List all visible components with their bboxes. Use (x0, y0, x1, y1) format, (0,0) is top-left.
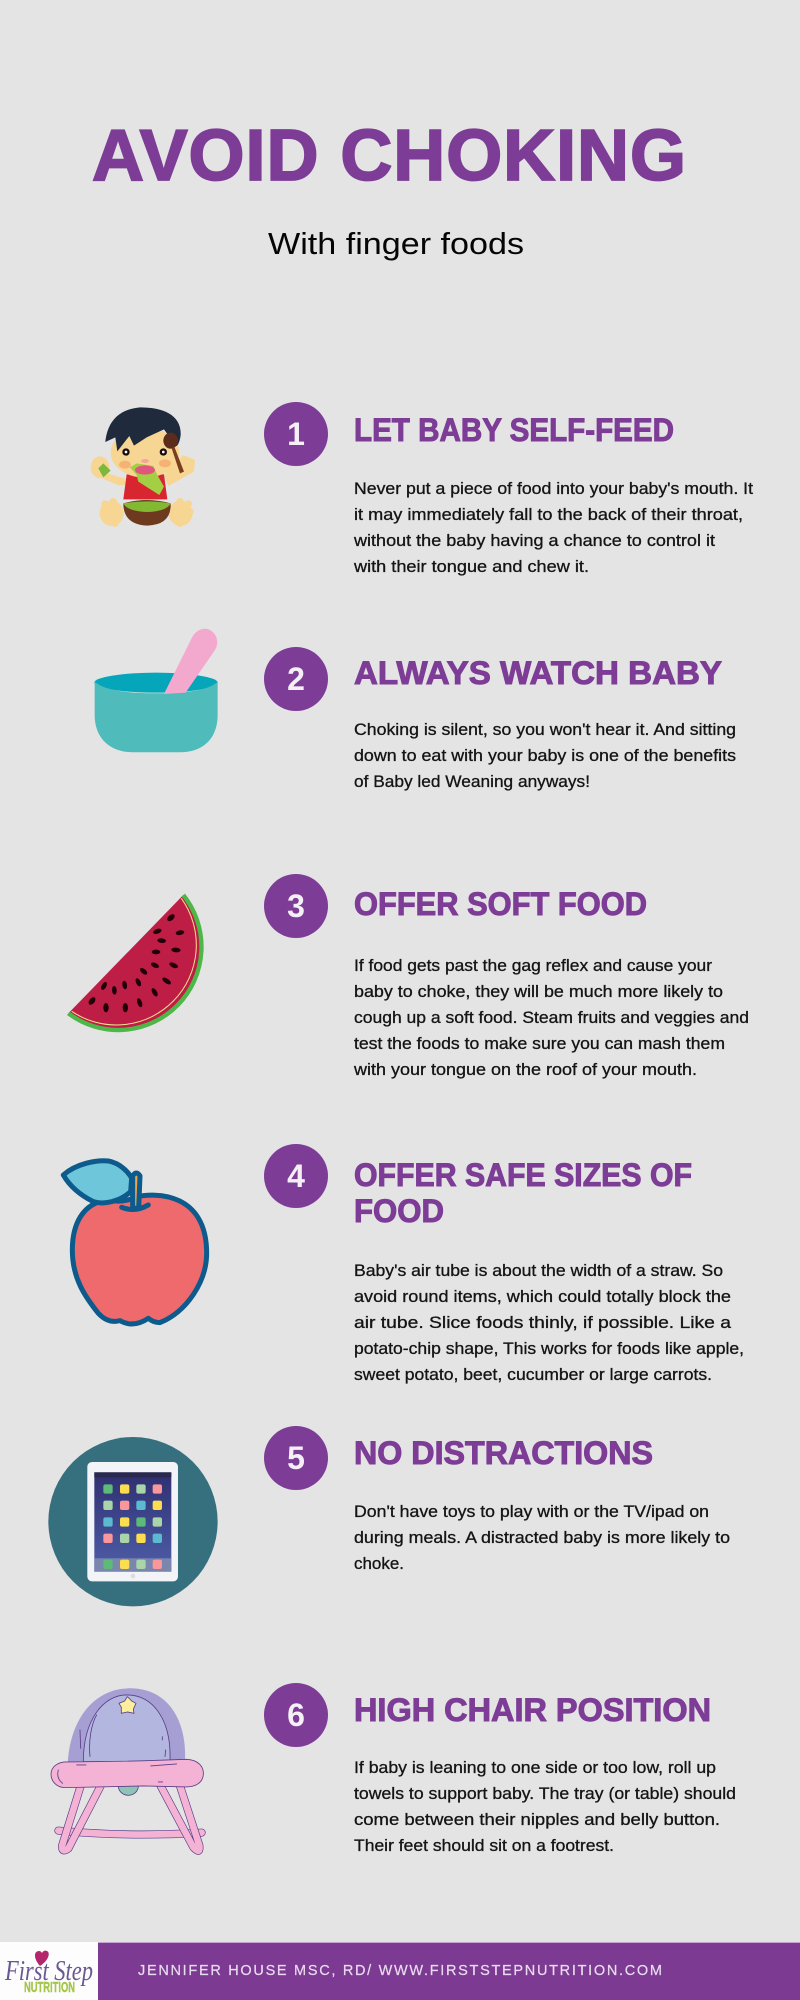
number badge 4 (264, 1144, 328, 1208)
body text: of Baby led Weaning anyways! (354, 773, 590, 791)
subtitle: With finger foods (268, 226, 524, 261)
body text: towels to support baby. The tray (or table) should (354, 1785, 736, 1803)
body text: Baby's air tube is about the width of a straw. So (354, 1262, 723, 1280)
number badge 5: 5 (287, 1440, 305, 1476)
icon: tablet in circle (48, 1437, 218, 1606)
panel: step 5 no distractions (48, 1426, 730, 1606)
logo: First Step Nutrition (0, 1942, 98, 2000)
number badge 1: 1 (287, 416, 305, 452)
panel: step 6 high chair position (51, 1683, 736, 1855)
icon: high chair (51, 1688, 203, 1851)
number badge 3 (264, 874, 328, 938)
icon: bowl and spoon (94, 629, 218, 752)
heading: OFFER SAFE SIZES OF (354, 1157, 692, 1193)
body text: Don't have toys to play with or the TV/ipad on (354, 1503, 709, 1521)
heading: OFFER SOFT FOOD (354, 886, 647, 922)
heading: HIGH CHAIR POSITION (354, 1692, 711, 1728)
heading (354, 1157, 692, 1229)
number badge 4: 4 (287, 1158, 305, 1194)
body text (354, 1503, 730, 1573)
footer (0, 1942, 800, 2000)
body text: down to eat with your baby is one of the benefits (354, 747, 736, 765)
heading: FOOD (354, 1193, 444, 1229)
body text: without the baby having a chance to control it (353, 532, 716, 550)
icon: apple (63, 1161, 207, 1324)
body text: during meals. A distracted baby is more likely to (354, 1529, 730, 1547)
number badge 2 (264, 647, 328, 711)
body text (354, 721, 736, 791)
body text: cough up a soft food. Steam fruits and veggies and (354, 1009, 749, 1027)
number badge 3: 3 (287, 888, 305, 924)
body text: Their feet should sit on a footrest. (354, 1837, 614, 1855)
panel: step 2 always watch baby (94, 629, 736, 791)
body text: potato-chip shape, This works for foods like apple, (354, 1340, 744, 1358)
body text: with your tongue on the roof of your mouth. (353, 1061, 697, 1079)
body text: air tube. Slice foods thinly, if possible. Like a (354, 1314, 731, 1332)
logo: First Step Nutrition: First Step (4, 1955, 93, 1987)
icon: watermelon slice (68, 895, 201, 1030)
panel: step 4 offer safe sizes (63, 1144, 744, 1384)
panel: step 1 let baby self-feed (91, 402, 754, 576)
body text (354, 1759, 736, 1855)
title: AVOID CHOKING (92, 116, 686, 196)
heading: NO DISTRACTIONS (354, 1435, 653, 1471)
logo: First Step Nutrition: NUTRITION (24, 1980, 75, 1996)
body text: come between their nipples and belly button. (354, 1811, 720, 1829)
number badge 6: 6 (287, 1697, 305, 1733)
number badge 2: 2 (287, 661, 305, 697)
heading: LET BABY SELF-FEED (354, 412, 674, 448)
body text: Never put a piece of food into your baby's mouth. It (354, 480, 754, 498)
body text: If baby is leaning to one side or too low, roll up (354, 1759, 716, 1777)
body text: it may immediately fall to the back of their throat, (354, 506, 743, 524)
body text: with their tongue and chew it. (353, 558, 589, 576)
body text: sweet potato, beet, cucumber or large carrots. (354, 1366, 712, 1384)
icon: baby eating (91, 407, 195, 527)
body text: If food gets past the gag reflex and cause your (354, 957, 713, 975)
body text (354, 1262, 744, 1384)
footer credit: JENNIFER HOUSE MSC, RD/ WWW.FIRSTSTEPNUTRITION.COM (138, 1963, 662, 1979)
body text: baby to choke, they will be much more likely to (354, 983, 723, 1001)
body text (353, 957, 749, 1079)
number badge 5 (264, 1426, 328, 1490)
panel: step 3 offer soft food (68, 874, 749, 1079)
body text (353, 480, 754, 576)
body text: choke. (354, 1555, 404, 1573)
body text: avoid round items, which could totally block the (354, 1288, 731, 1306)
body text: Choking is silent, so you won't hear it. And sitting (354, 721, 736, 739)
body text: test the foods to make sure you can mash them (354, 1035, 725, 1053)
heading: ALWAYS WATCH BABY (354, 655, 722, 691)
number badge 6 (264, 1683, 328, 1747)
number badge 1 (264, 402, 328, 466)
